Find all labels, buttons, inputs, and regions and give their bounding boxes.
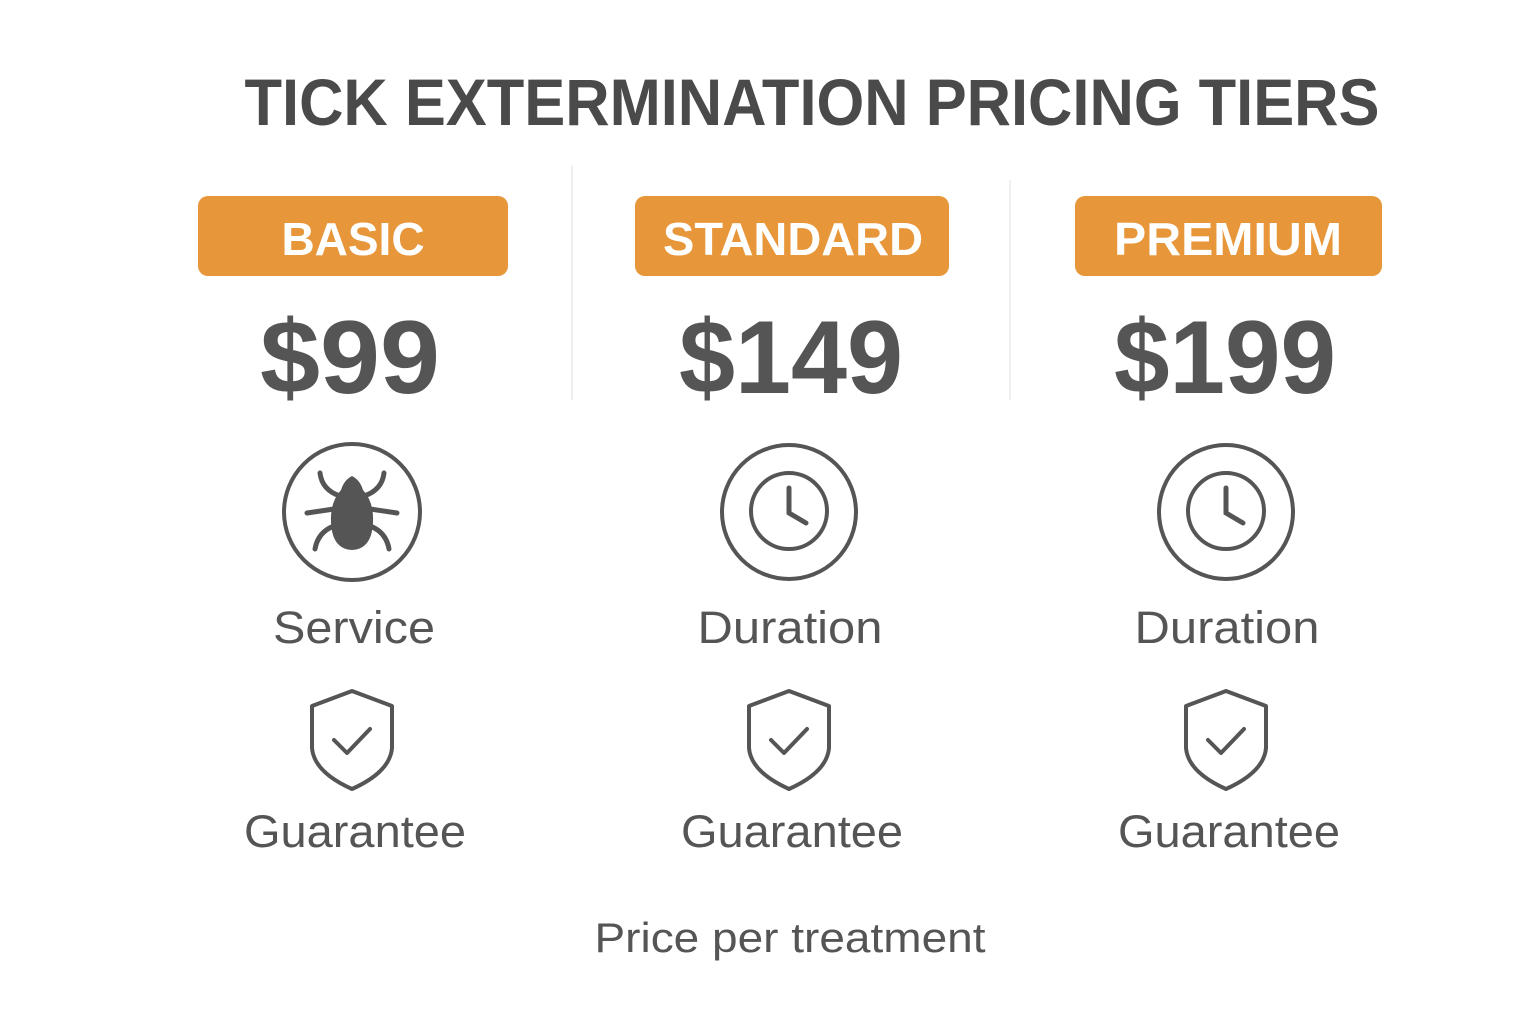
- badge: standard: STANDARD: [663, 213, 923, 265]
- icon: shield: [312, 691, 392, 789]
- title: TICK EXTERMINATION PRICING TIERS: [244, 65, 1380, 139]
- badge: basic: BASIC: [281, 213, 425, 265]
- icon: clock: [722, 445, 856, 579]
- icon: tick: [284, 444, 420, 580]
- label: service: Service: [273, 602, 435, 653]
- price: $149: $149: [679, 300, 903, 416]
- price: $99: $99: [260, 300, 440, 416]
- price: $199: $199: [1114, 300, 1336, 416]
- label: guarantee: Guarantee: [1118, 806, 1340, 857]
- panel: standard: [635, 196, 949, 857]
- badge: premium: PREMIUM: [1114, 213, 1342, 265]
- label: guarantee: Guarantee: [681, 806, 903, 857]
- label: guarantee: Guarantee: [244, 806, 466, 857]
- badge: standard: [635, 196, 949, 276]
- icon: clock: [1159, 445, 1293, 579]
- badge: basic: [198, 196, 508, 276]
- panel: premium: [1075, 196, 1382, 857]
- badge: premium: [1075, 196, 1382, 276]
- panel: basic: [198, 196, 508, 857]
- icon: shield: [1186, 691, 1266, 789]
- label: duration: Duration: [698, 602, 882, 653]
- label: duration: Duration: [1134, 602, 1320, 653]
- footer note: Price per treatment: [594, 914, 986, 961]
- icon: shield: [749, 691, 829, 789]
